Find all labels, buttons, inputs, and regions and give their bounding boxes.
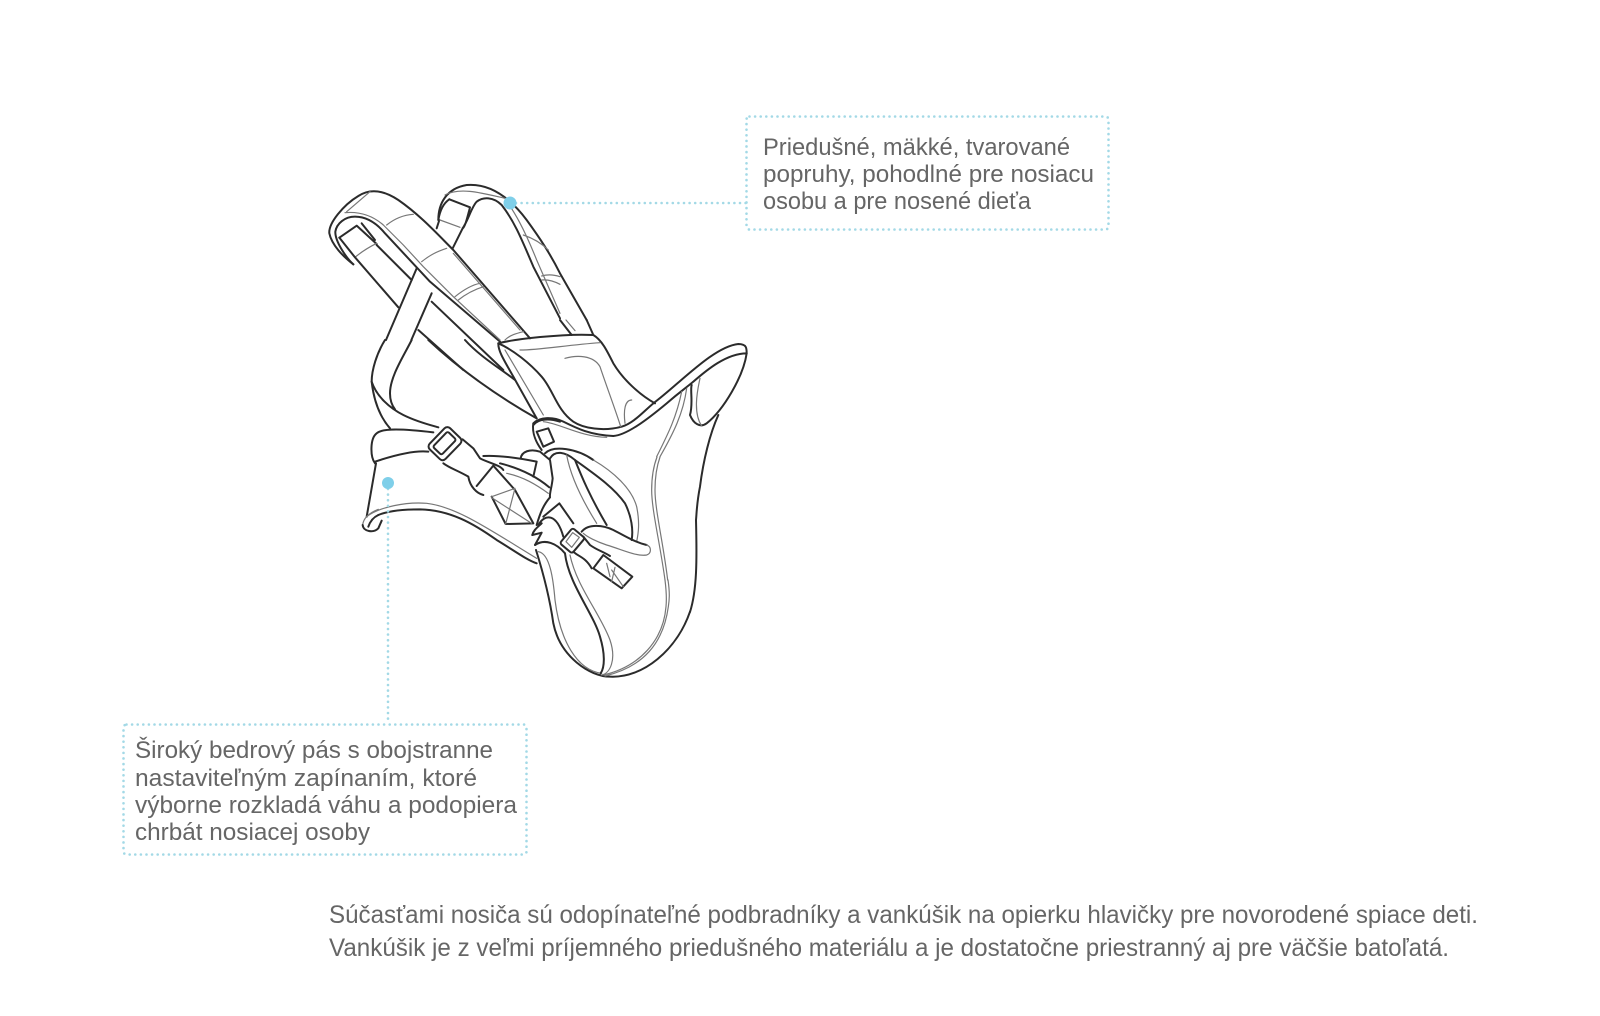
callout text: popruhy, pohodlné pre nosiacu [763, 161, 1094, 188]
waist belt with buckle [363, 425, 537, 563]
leader line and marker [382, 477, 394, 724]
illustration: baby carrier line drawing [329, 185, 747, 677]
lower body and side buckle [536, 550, 690, 677]
central buckle and side straps [500, 419, 668, 580]
head pad and upper body panel [498, 320, 747, 612]
lower strap and waist top [372, 340, 537, 428]
callout text [763, 134, 1094, 215]
bottom description text: Súčasťami nosiča sú odopínateľné podbradníky a vankúšik na opierku hlavičky pre novorodené spiace deti. [329, 901, 1478, 929]
callout: waist belt [124, 477, 526, 854]
callout box outline [124, 724, 526, 854]
callout text [135, 736, 518, 846]
callout text: Priedušné, mäkké, tvarované [763, 134, 1070, 161]
callout text: Široký bedrový pás s obojstranne [135, 736, 493, 764]
callout text: výborne rozkladá váhu a podopiera [135, 792, 518, 819]
callout text: chrbát nosiacej osoby [135, 819, 370, 846]
callout text: nastaviteľným zapínaním, ktoré [135, 765, 477, 792]
bottom description text [329, 901, 1478, 962]
bottom description text: Vankúšik je z veľmi príjemného priedušného materiálu a je dostatočne priestranný aj pre väčšie batoľatá. [329, 934, 1449, 962]
leader line and marker [504, 196, 746, 210]
callout text: osobu a pre nosené dieťa [763, 188, 1032, 215]
callout: breathable straps [504, 116, 1108, 230]
shoulder straps [329, 185, 587, 370]
callout box outline [746, 116, 1108, 230]
